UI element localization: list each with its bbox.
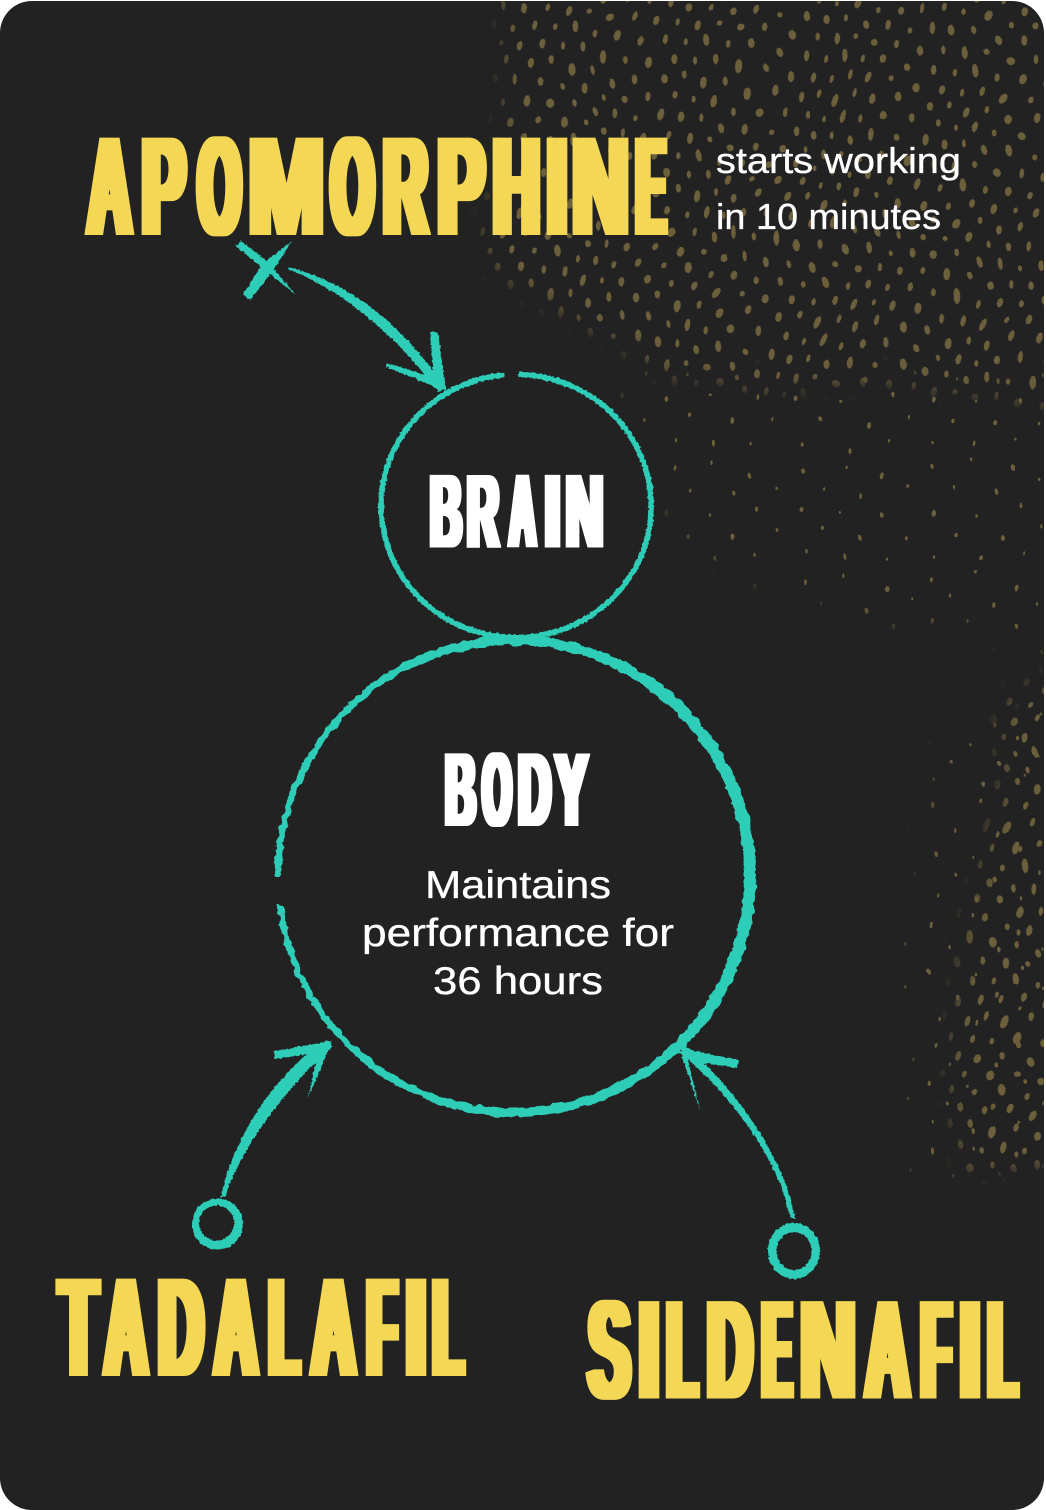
arrow: tadalafil to body — [221, 1040, 333, 1197]
label: TADALAFIL: A — [215, 1248, 257, 1406]
infographic canvas: L — [434, 1248, 463, 1406]
title: APOMORPHINE: P — [438, 108, 484, 264]
label: SILDENAFIL: A — [866, 1271, 909, 1428]
label: TADALAFIL: D — [158, 1248, 203, 1406]
label: TADALAFIL: L — [270, 1248, 299, 1406]
arrow: sildenafil to body — [679, 1046, 795, 1218]
label: SILDENAFIL: I — [960, 1271, 980, 1428]
label: SILDENAFIL: E — [763, 1271, 791, 1428]
label: BRAIN: A — [510, 454, 536, 570]
speckled dot texture — [430, 0, 1046, 1190]
label: TADALAFIL: T — [60, 1248, 97, 1406]
title: APOMORPHINE: A — [88, 108, 131, 264]
title: APOMORPHINE: O — [198, 108, 240, 264]
circle: brain — [381, 374, 651, 637]
label: BRAIN: B — [430, 454, 462, 570]
label: BRAIN: I — [544, 454, 561, 570]
text: duration: Maintains — [425, 864, 611, 907]
icon: sildenafil ring — [768, 1223, 820, 1279]
label: SILDENAFIL: L — [668, 1271, 697, 1428]
title: APOMORPHINE: M — [248, 108, 324, 264]
label: SILDENAFIL: S — [589, 1271, 630, 1428]
title: APOMORPHINE: P — [142, 108, 185, 264]
label: SILDENAFIL: F — [922, 1271, 950, 1428]
icon: cross marker — [236, 241, 295, 300]
text: onset time — [716, 140, 961, 237]
label: BODY: O — [483, 732, 511, 848]
title: APOMORPHINE: R — [384, 108, 427, 264]
text: onset time: in 10 minutes — [716, 196, 941, 237]
label: TADALAFIL: A — [105, 1248, 147, 1406]
text: duration: performance for — [362, 912, 674, 955]
label: BRAIN: N — [566, 454, 603, 570]
arrow: apomorphine to brain — [288, 267, 446, 392]
title: APOMORPHINE: O — [331, 108, 374, 264]
label: SILDENAFIL: D — [708, 1271, 752, 1428]
label: TADALAFIL: A — [312, 1248, 355, 1406]
title: APOMORPHINE: N — [572, 108, 629, 264]
infographic canvas: E — [637, 108, 665, 264]
text: onset time: starts working — [716, 140, 961, 181]
label: SILDENAFIL: N — [800, 1271, 856, 1428]
label: TADALAFIL: F — [368, 1248, 396, 1406]
label: TADALAFIL: I — [406, 1248, 426, 1406]
title: APOMORPHINE: I — [547, 108, 567, 264]
label: SILDENAFIL: I — [639, 1271, 659, 1428]
label: BRAIN: R — [467, 454, 499, 570]
icon: tadalafil ring — [192, 1198, 243, 1250]
label: BODY: D — [518, 732, 551, 848]
text: duration — [362, 864, 674, 1003]
label: BODY: B — [445, 732, 476, 848]
infographic canvas: Y — [556, 732, 588, 848]
title: APOMORPHINE: H — [493, 108, 540, 264]
text: duration: 36 hours — [433, 960, 603, 1003]
circle: body — [266, 636, 756, 1116]
